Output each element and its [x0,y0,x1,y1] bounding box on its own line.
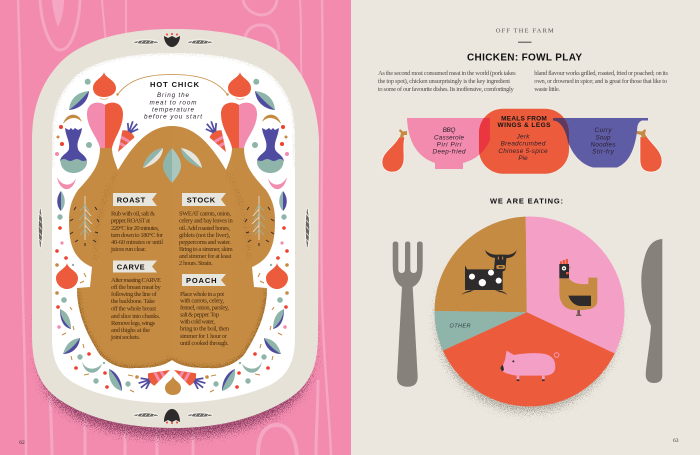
overlap: purple and orange [553,118,569,144]
text: carve method: Remove legs, wings [111,320,155,327]
text: poach method: Place whole in a pot [180,291,224,298]
label: meals from wings and legs: MEALS FROM [501,116,547,122]
text: roast method: turn down to 180°C for [111,232,164,239]
text: intro left column: As the second most consumed meat in the world (pork takes [378,70,516,77]
chicken centre fold [172,127,232,362]
heading: hot chick arc [117,74,228,95]
panel: pink left page [0,0,351,455]
heading: hot chick: HOT CHICK [150,80,200,89]
plate shadow stipple [433,226,623,416]
text: carve method: and slice into chunks. [111,313,160,320]
banner: carve [113,260,157,272]
text: intro right column: waste little. [534,86,560,93]
icon: bottom centre onion [165,376,181,395]
label: orange bowl meals: Pie [518,155,528,162]
pie chart: meat consumption plate [434,216,624,406]
icon: top right rim leaf [187,39,213,45]
text: stock method: 2 hours. Strain. [179,260,213,267]
text: carve method [110,277,161,341]
label: pink bowl meals: Deep-fried [432,149,466,156]
icon: left rim leaf [38,207,43,249]
text: hot chick tip: before you start [144,113,202,120]
text: stock method: Bring to a simmer, skim [179,246,233,253]
text: intro left column: the top spot), chicken unsurprisingly is the key ingredient [378,78,510,85]
overlap: pink and orange [479,118,490,154]
text: carve method: and thighs at the [111,327,150,334]
icon: right rim leaf [305,207,310,249]
icon: knife [641,239,662,383]
text: poach method: with cold water, [180,318,215,326]
label: pink bowl meals: Casserole [434,134,464,141]
slice: chicken [526,216,624,354]
label: orange bowl meals: Breadcrumbed [501,141,546,148]
text: poach method: simmer for 1 hour or [180,333,228,340]
text: poach method: until cooked through. [180,340,229,347]
text: intro right column [534,70,668,93]
icon: bottom crown ornament [164,409,180,424]
panel: serving platter [32,29,319,428]
text: carve method: off the whole breast [111,306,156,312]
text: hot chick tip: temperature [152,106,194,113]
text: intro right column: bland flavour works grilled, roasted, fried or poached; on its [534,70,668,77]
text: poach method: fennel, onion, parsley, [180,304,229,312]
text: stock method: SWEAT carrots, onion, [179,210,231,218]
icon: bottom right rim leaf [187,412,213,418]
chart: meals venn bowls [382,109,662,174]
label: pink bowl meals: BBQ [443,127,455,134]
text: hot chick tip: Bring the [157,92,189,99]
text: poach method [180,291,230,347]
banner: carve: CARVE [117,262,145,271]
banner: roast [113,193,157,206]
label: pink bowl meals [432,127,466,156]
label: purple bowl meals: Stir-fry [592,149,615,156]
text: poach method: with carrots, celery, [180,297,224,304]
banner: stock: STOCK [187,196,216,204]
label: meals from wings and legs: WINGS & LEGS [498,122,551,129]
right side decorations [171,72,289,392]
chicken body [69,126,275,368]
text: carve method: the backbone. Take [111,298,155,305]
icon: right drumstick [637,129,662,172]
pink bowl [407,118,490,169]
text: roast method: juices run clear. [110,246,146,253]
banner: roast: ROAST [117,196,146,204]
label: purple bowl meals: Soup [596,134,611,141]
chicken body stipple shading [77,170,267,368]
text: roast method: Rub with oil, salt & [111,210,155,218]
platter inner stipple edge [52,53,295,170]
text: roast method: 220°C for 20 minutes, [111,225,159,232]
label: purple bowl meals: Noodles [590,142,616,148]
icon: left fern [70,196,99,246]
text: stock method [179,210,233,267]
wood grain pattern [18,0,331,455]
section label: OFF THE FARM [496,28,554,34]
label: orange bowl meals [498,133,548,162]
icon: top crown ornament [164,33,180,47]
text: intro right column: own, or drowned in spice; and is great for those that like to [534,78,667,85]
page number: 62: 62 [19,440,25,446]
text: roast method [110,210,164,253]
slice: other [434,311,526,350]
icon: top left rim leaf [133,39,159,45]
label: pink bowl meals: Piri Piri [437,142,462,148]
icon: bottom left rim leaf [133,412,159,418]
text: carve method: After roasting CARVE [111,277,161,284]
label: orange bowl meals: Jerk [516,133,530,140]
slice: beef [434,216,527,312]
text: roast method: 40-60 minutes or until [111,239,163,246]
text: stock method: peppercorns and water. [179,239,231,246]
platter shadow stipple [35,313,316,441]
purple bowl [553,118,648,168]
text: hot chick tip: meat to room [150,99,196,106]
platter white centre [52,53,295,403]
text: hot chick tip [144,92,202,120]
text: intro left column: to some of our favourite dishes. Its inoffensive, comfortingly [378,86,514,93]
text: stock method: giblets (not the liver), [179,232,230,239]
text: intro left column [378,70,516,93]
orange rounded bowl [479,109,569,174]
label: meals from wings and legs [498,116,551,129]
label: other: OTHER [450,324,471,330]
icon: pig [500,351,559,381]
banner: poach: POACH [186,276,216,285]
text: stock method: oil. Add roasted bones, [179,225,230,232]
icon: chicken [559,259,597,316]
platter rim [32,29,319,428]
text: poach method: bring to the boil, then [180,326,230,332]
text: poach method: salt & pepper. Top [180,311,219,318]
icon: three chicken leaves [143,148,202,183]
text: carve method: off the breast meat by [111,284,161,291]
left side decorations [55,72,173,392]
label: orange bowl meals: Chinese 5-spice [498,148,548,155]
page number: 63: 63 [673,438,679,444]
banner: stock [182,193,226,206]
icon: right fern [245,196,274,246]
title: CHICKEN: FOWL PLAY [467,53,582,64]
banner: poach [182,274,226,286]
slice: pork [443,312,615,406]
heading: we are eating: WE ARE EATING: [490,196,563,206]
label: purple bowl meals [590,127,616,156]
icon: left drumstick [382,129,407,172]
text: carve method: following the line of [111,291,158,298]
text: stock method: and simmer for at least [179,253,231,260]
text: carve method: joint sockets. [110,334,140,341]
text: roast method: pepper. ROAST at [111,218,150,224]
icon: fork [393,242,423,387]
icon: cow [461,250,517,295]
text: stock method: celery and bay leaves in [179,218,233,224]
label: purple bowl meals: Curry [594,127,612,134]
